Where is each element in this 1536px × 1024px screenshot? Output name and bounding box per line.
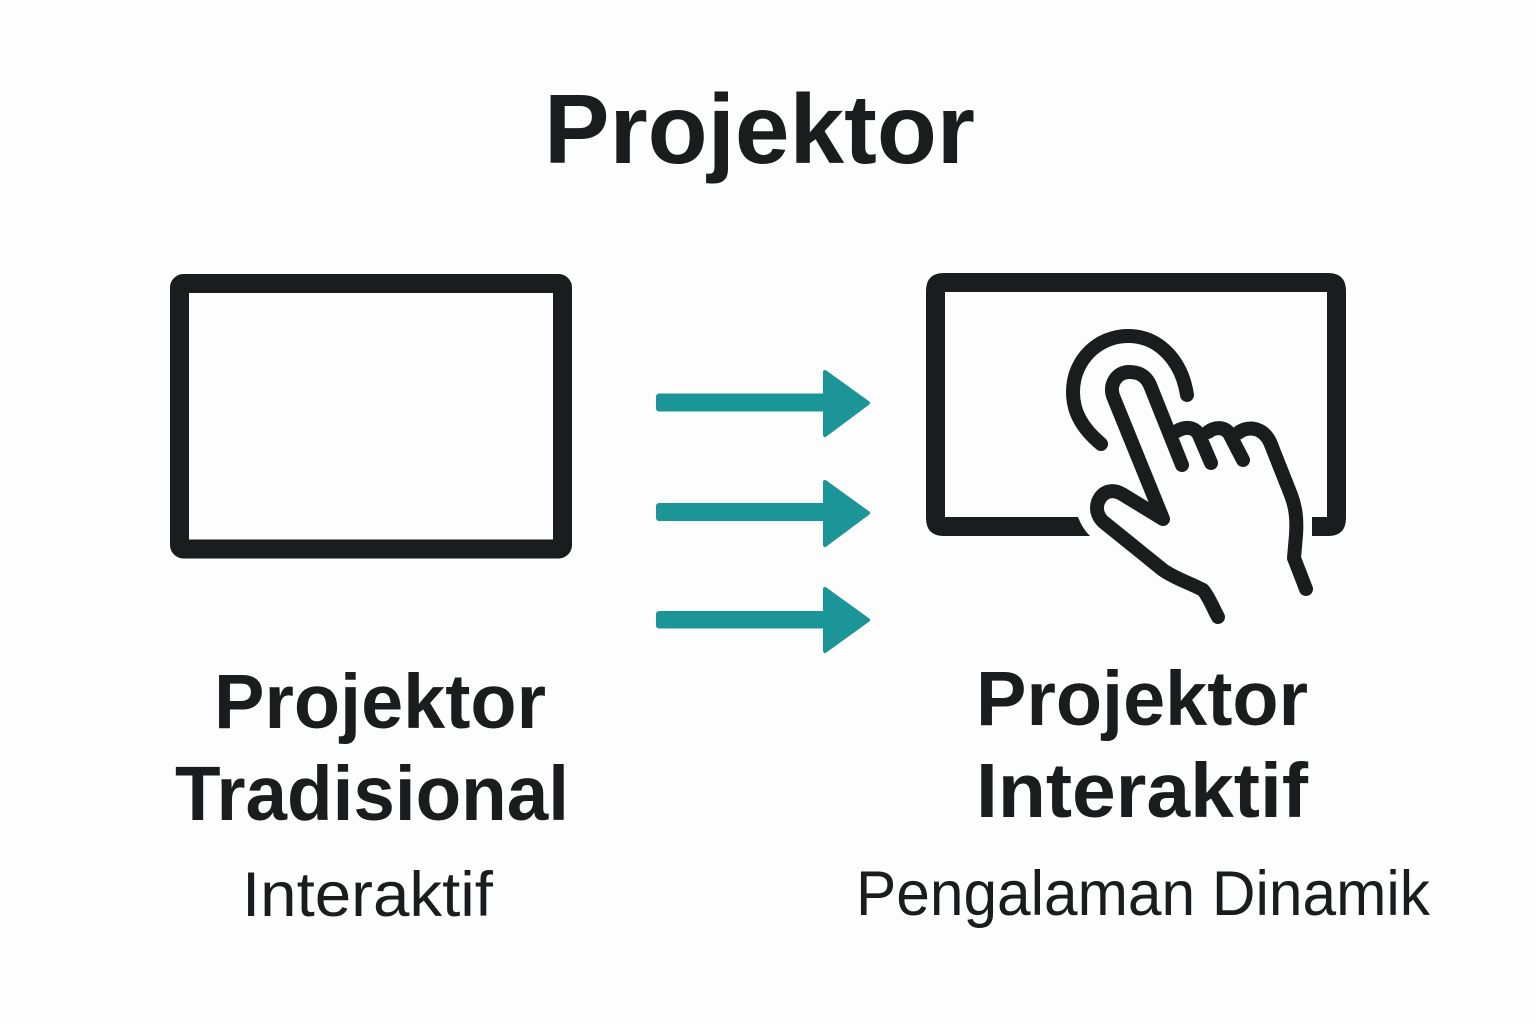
heading: Projektor Interaktif [976, 656, 1308, 834]
arrow: top [656, 372, 868, 435]
back of hand [1238, 429, 1306, 589]
knuckle 2 [1177, 428, 1211, 463]
heading: Projektor Tradisional: Projektor [214, 659, 546, 745]
panel: traditional projector [175, 284, 569, 930]
arrows: transition [656, 372, 868, 651]
icon: touch screen [926, 273, 1346, 536]
heading: Projektor Tradisional: Tradisional [175, 751, 569, 837]
heading: Projektor Interaktif: Projektor [976, 656, 1308, 742]
knuckle 3 [1208, 428, 1243, 460]
index finger and thumb [1097, 372, 1218, 617]
icon: blank screen [180, 284, 562, 549]
caption: Pengalaman Dinamik: Pengalaman Dinamik [856, 859, 1430, 929]
heading: Projektor Tradisional [175, 659, 569, 837]
panel: interactive projector [856, 273, 1430, 929]
arrow: middle [656, 482, 868, 545]
title: Projektor [544, 74, 975, 184]
touch ripple [1073, 336, 1187, 444]
icon: pointing hand with touch ripple [1073, 336, 1306, 617]
arrow: bottom [656, 589, 868, 651]
heading: Projektor Interaktif: Interaktif [976, 748, 1308, 834]
caption: Interaktif: Interaktif [242, 860, 494, 930]
